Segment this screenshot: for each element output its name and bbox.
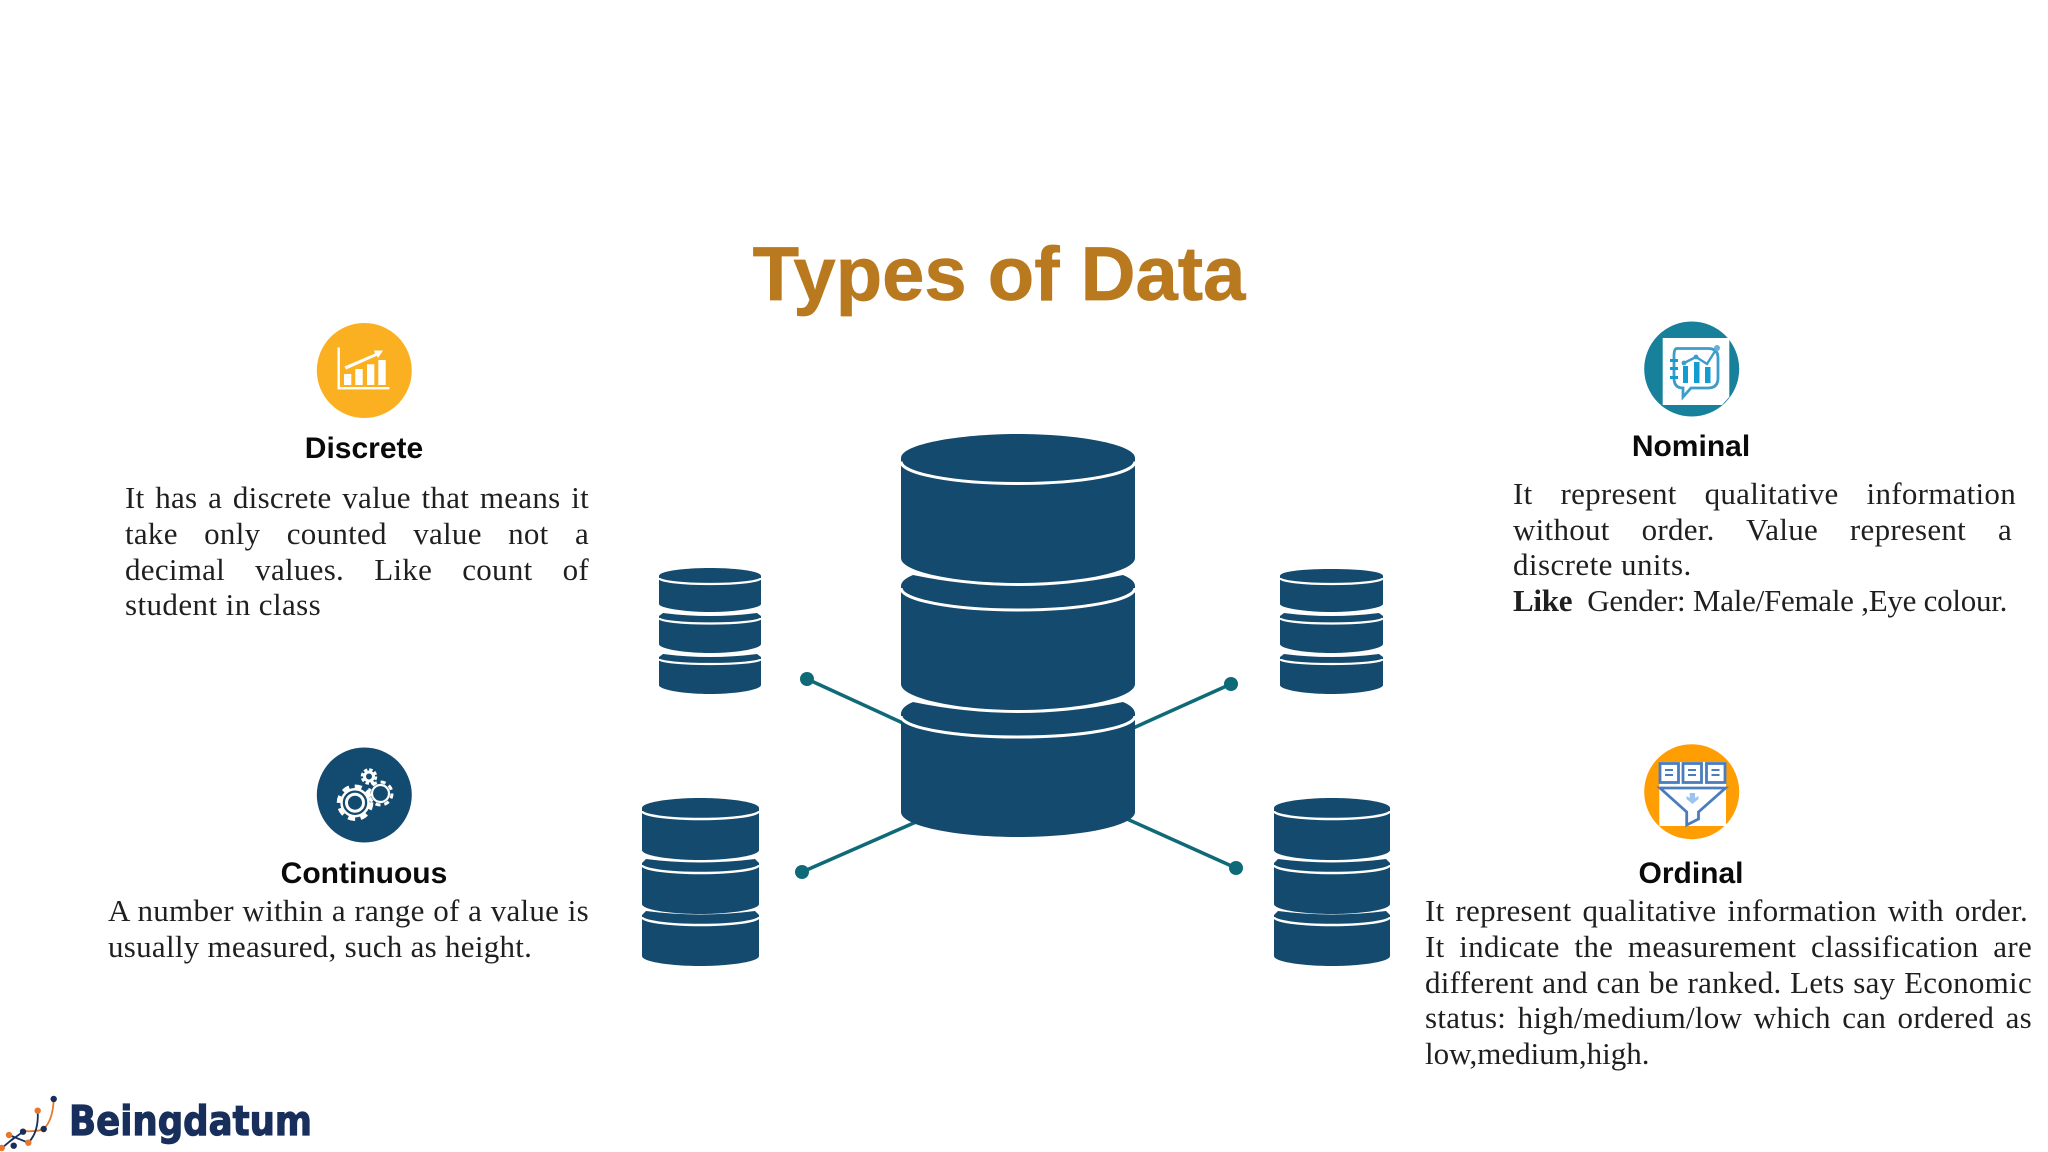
small database cylinder: top right (1280, 569, 1383, 694)
icon: ordinal funnel (1644, 744, 1739, 839)
icon: discrete bar chart (317, 323, 412, 418)
text block: Nominal description: discrete units. (1513, 547, 1692, 582)
heading: Nominal: Nominal (1632, 430, 1750, 463)
text block: Discrete description (125, 480, 589, 622)
text block: Continuous description: usually measured, such as height. (108, 929, 532, 964)
connector lines with dots (795, 672, 1243, 879)
small database cylinder: top left (659, 568, 761, 694)
title: Types of Data (753, 232, 1245, 317)
text block: Ordinal description (1425, 893, 2032, 1071)
logo: Beingdatum (0, 1096, 312, 1151)
text block: Discrete description: It has a discrete value that means it (125, 480, 589, 515)
heading: Ordinal: Ordinal (1638, 857, 1744, 890)
text block: Ordinal description: status: high/medium/low which can ordered as (1425, 1000, 2032, 1035)
text block: Continuous description: A number within a range of a value is (108, 893, 589, 928)
logo: Beingdatum: Beingdatum (69, 1097, 312, 1145)
icon: nominal chat chart (1644, 322, 1739, 416)
text block: Nominal description: It represent qualitative information (1513, 476, 2016, 511)
text block: Nominal description: Like Gender: Male/Female ,Eye colour. (1513, 583, 2007, 618)
text block: Continuous description (108, 893, 589, 964)
central database cylinder (901, 434, 1135, 837)
text block: Ordinal description: different and can be ranked. Lets say Economic (1425, 965, 2032, 1000)
text block: Nominal description: without order. Value represent a (1513, 512, 2012, 547)
heading: Discrete: Discrete (305, 432, 423, 465)
icon: continuous gears (317, 748, 412, 842)
text block: Discrete description: take only counted value not a (125, 516, 589, 551)
heading: Continuous: Continuous (281, 857, 447, 890)
text block: Ordinal description: It represent qualitative information with order. (1425, 893, 2028, 928)
text block: Nominal description (1513, 476, 2016, 618)
text block: Ordinal description: low,medium,high. (1425, 1036, 1649, 1071)
text block: Discrete description: student in class (125, 587, 321, 622)
text block: Ordinal description: It indicate the measurement classification are (1425, 929, 2032, 964)
text block: Discrete description: decimal values. Like count of (125, 552, 589, 587)
small database cylinder: bottom left (642, 798, 759, 966)
small database cylinder: bottom right (1274, 798, 1390, 966)
